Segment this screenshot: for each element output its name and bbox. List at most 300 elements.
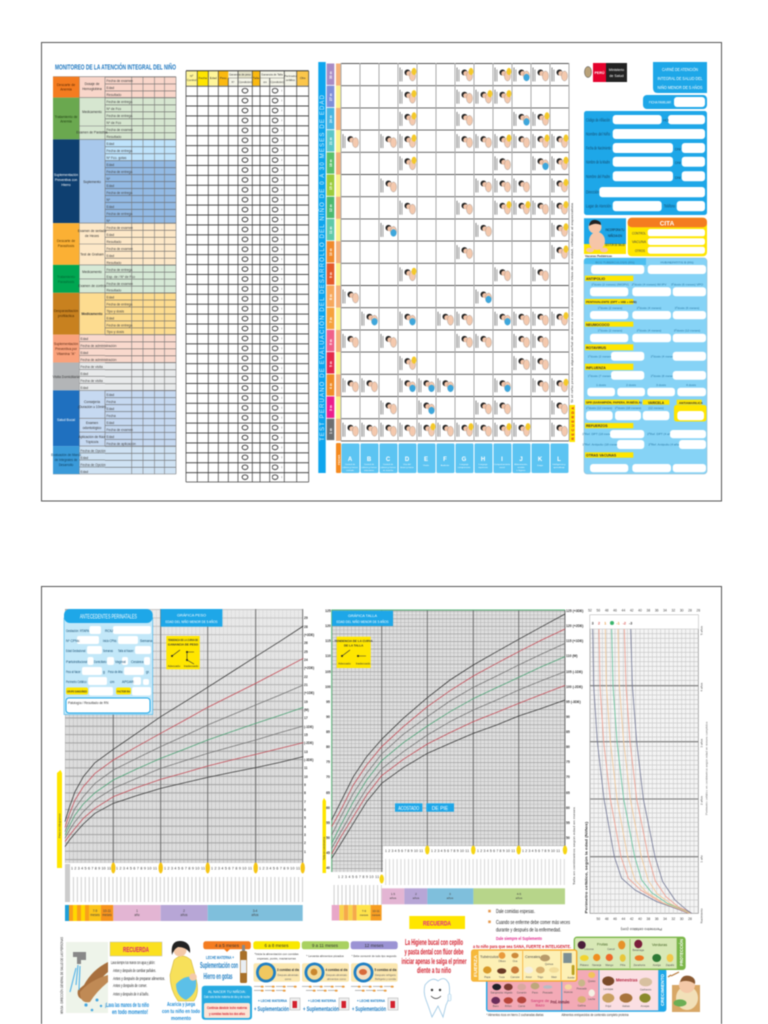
legume labels xyxy=(603,978,652,1008)
category: desparasitacion xyxy=(53,293,79,335)
right scale: 120 (+2DE) xyxy=(566,624,583,628)
column: 4 a 5 meses: Suplementación con xyxy=(200,961,238,970)
vaccine panel caption: Vacunas Pediátricas xyxy=(585,254,612,258)
blue box: AL NACER TU NIÑO/A: xyxy=(208,989,246,994)
right scale: (+3DE) xyxy=(304,633,314,637)
dose labels: 1ºdosis (12 meses) xyxy=(586,406,612,410)
row labels: Resultado xyxy=(106,135,122,139)
row labels: Edad xyxy=(106,393,114,397)
category: vitamina a xyxy=(53,335,79,362)
sub categories: Medicamento xyxy=(81,312,103,316)
food labels: Zapallo xyxy=(666,963,675,967)
animal food labels: Huevos xyxy=(564,990,573,994)
callout: wash hands xyxy=(105,1003,149,1016)
form labels: DNI xyxy=(675,176,681,180)
bullets xyxy=(488,910,491,923)
age strips right xyxy=(382,888,565,904)
row labels: Edad xyxy=(80,456,88,460)
month labels: 9 m xyxy=(329,272,333,278)
right scale: 90 xyxy=(566,715,570,719)
panel: proteccion foods xyxy=(574,937,685,969)
y axis arrow: Peso en kilogramos xyxy=(58,813,62,838)
sub categories: Tópico/a xyxy=(86,440,98,444)
animal food labels: Pescado xyxy=(543,990,553,994)
food labels: Carcol xyxy=(607,947,615,951)
group titles: Cereales xyxy=(525,955,540,959)
column: 6 a 8 meses: 6 a 8 meses xyxy=(265,943,289,948)
panel: proteccion foods: PROTECCIÓN xyxy=(679,939,684,966)
category labels: en marcha xyxy=(383,469,394,472)
form labels: Lugar de Atención xyxy=(586,204,611,208)
sub categories: Medicamento xyxy=(82,270,102,274)
age strips: años xyxy=(252,913,259,917)
right scale: (+2DE) xyxy=(304,666,314,670)
bottom scale: 40 xyxy=(638,917,642,921)
age strips right: años xyxy=(447,896,454,900)
category: desparasitacion: Desparasitación xyxy=(54,309,78,313)
labels: Gestación: xyxy=(66,629,79,633)
category labels: cabeza y tronco xyxy=(361,466,377,469)
legend: 3 xyxy=(592,621,594,625)
dose labels: 1ºdosis (2 meses) xyxy=(598,328,622,332)
panel: fuerza foods: FUERZA xyxy=(473,954,478,977)
category labels: E xyxy=(424,457,428,463)
sub categories: Examen xyxy=(86,421,98,425)
energy food labels: Yuca xyxy=(499,975,505,979)
tamizaje box: Patología / Resultado de RN xyxy=(68,701,109,705)
age strips right: 1.5 xyxy=(391,892,395,896)
spoons xyxy=(302,986,345,992)
right scale: 85 xyxy=(566,730,570,734)
left scale: 95 xyxy=(326,700,330,704)
group titles: Tubérculos xyxy=(480,955,499,959)
vaccine tag text: ANTIPOLIO xyxy=(586,277,605,281)
spoons xyxy=(351,986,394,992)
animal food labels: Corazón xyxy=(517,990,527,994)
row labels: Fecha xyxy=(106,400,116,404)
right scale: 4 xyxy=(304,825,306,829)
title: monitoreo: MONITOREO DE LA ATENCIÓN INTEGRAL DEL NIÑO xyxy=(55,62,176,72)
bottom axis caption: Perímetro cefálico (cm) xyxy=(620,927,662,932)
group titles xyxy=(597,942,667,947)
category: suplementacion: Preventiva con xyxy=(55,178,77,182)
advice text: Cuando se enferme debe comer más veces xyxy=(496,920,570,926)
height trend box: TENDENCIA DE LA CURVA xyxy=(335,639,374,643)
month labels: 8 m xyxy=(329,294,333,300)
supplement message xyxy=(473,936,571,949)
category labels: cabeza y tronco xyxy=(380,466,396,469)
milk plus supplement: + LECHE MATERNA xyxy=(308,999,336,1003)
blue box: y comidas hasta los dos años xyxy=(209,1012,245,1016)
table header: Peso xyxy=(220,76,227,80)
meal card: Refrigerio y comida xyxy=(375,977,396,981)
row labels: Fecha de examen xyxy=(106,226,133,230)
category: parasitosis: Parasitosis xyxy=(58,244,75,248)
age strips left: 7-9 xyxy=(362,909,366,913)
milk plus supplement xyxy=(352,999,386,1013)
dose labels: 1ºRef. Antipolio (18 meses) xyxy=(582,442,620,446)
weight chart title xyxy=(161,609,222,627)
yellow highlighted field xyxy=(674,405,706,422)
date tab xyxy=(336,443,341,473)
bottom scale: 50 xyxy=(596,917,600,921)
left scale: 105 xyxy=(325,670,331,674)
labels: Domiciliario xyxy=(94,660,107,664)
right scale: 17 xyxy=(304,716,308,720)
form labels: Fecha de Nacimiento xyxy=(586,146,611,150)
height chart title: GRÁFICA TALLA xyxy=(348,614,377,618)
heading: recuerda left xyxy=(110,942,162,956)
dose labels: 2ºdosis (4 meses) xyxy=(637,306,661,310)
message: Hierro en gotas xyxy=(204,972,233,981)
callout: caress and play: con tu niño en todo xyxy=(162,1009,201,1015)
category labels: brazo y mano xyxy=(400,466,414,469)
labels: Nº CPNs: xyxy=(66,639,80,643)
category labels: comprensivo xyxy=(458,466,471,469)
row labels: Fecha de examen xyxy=(106,428,133,432)
energy foods xyxy=(483,952,574,975)
subsection dividers xyxy=(53,77,176,474)
group titles: Frutas xyxy=(597,942,608,946)
row labels: Edad xyxy=(106,163,114,167)
labels: Semanas xyxy=(103,649,113,653)
right scale: 22 xyxy=(304,675,308,679)
animal foods captions: Prod. Animales xyxy=(550,1000,570,1004)
left scale: 115 xyxy=(325,639,331,643)
category: suplementacion: Suplementación xyxy=(54,173,78,177)
x axis months: 1 2 3 4 5 6 7 8 9 10 11 xyxy=(259,866,300,870)
blood group tags: GRUPO SANGUÍNEO xyxy=(67,688,87,694)
year lines xyxy=(113,609,303,863)
right scale: 50 xyxy=(566,836,570,840)
footnote: * Alimentos ricos en hierro 2 cucharadas diarias xyxy=(486,1013,544,1017)
row labels: Edad xyxy=(80,351,88,355)
meal card: alimentos como xyxy=(327,977,347,981)
chart title: Perímetro cefálico, según la edad (Niños) xyxy=(584,821,588,913)
animal food labels: Gallina xyxy=(578,1004,586,1008)
cita panel: CITA xyxy=(660,220,675,228)
blood group tags: FACTOR RH xyxy=(117,690,131,694)
age strips left xyxy=(332,905,382,920)
chart: head circumference xyxy=(584,609,708,923)
row labels: Edad xyxy=(80,337,88,341)
test grid xyxy=(341,64,569,441)
food labels: Plátano xyxy=(580,963,589,967)
dose labels: 1ºdosis (7 meses) xyxy=(588,374,612,378)
left scale: 125 xyxy=(325,609,331,613)
legend: 2 xyxy=(598,621,600,625)
legume labels: Lentejas xyxy=(603,987,614,991)
cita panel: OTROS xyxy=(635,249,645,253)
vaccine tag text: OTRAS VACUNAS xyxy=(586,454,617,458)
category: vitamina a: Vitamina "A" xyxy=(57,352,76,356)
dose labels: 2ºRef. DPT (4 años) xyxy=(647,432,675,436)
right scale: 7 xyxy=(304,800,306,804)
month labels: 12 m xyxy=(329,204,333,212)
chart grid xyxy=(590,615,698,913)
top scale: 34 xyxy=(663,609,667,613)
right scale: 21 xyxy=(304,683,308,687)
logo: ministerio de salud: PERÚ xyxy=(594,70,605,75)
age labels: 5 años xyxy=(699,626,703,635)
month labels: 21 m xyxy=(329,137,333,145)
category: vitamina a: Suplementación xyxy=(54,342,78,346)
dose labels: 1 dosis xyxy=(596,383,606,387)
vaccine tags xyxy=(585,276,702,458)
weight chart title: EDAD DEL NIÑO MENOR DE 5 AÑOS xyxy=(166,619,218,624)
category labels: rotaciones xyxy=(364,469,375,472)
month labels xyxy=(327,64,334,440)
animal foods captions: Bazo xyxy=(535,1002,545,1008)
legend: -3 xyxy=(629,621,632,625)
dose labels: 1ºdosis (2 meses) (IMOPV) xyxy=(591,282,629,286)
illustration: child eating xyxy=(668,972,700,1012)
right scale: 25 xyxy=(304,650,308,654)
top scale: 28 xyxy=(688,609,692,613)
meal card: Después aliméntalo xyxy=(278,973,299,977)
illustration: hand washing xyxy=(66,942,108,1013)
age strips: meses xyxy=(102,913,112,917)
right scale: (-3DE) xyxy=(304,758,313,762)
month labels: 10 m xyxy=(329,248,333,256)
row labels: Fecha de entrega xyxy=(106,114,133,118)
height trend box: Adecuado xyxy=(338,662,351,666)
category: desparasitacion: profiláctica xyxy=(58,314,74,318)
category labels: cabeza y tronco xyxy=(342,466,358,469)
panel: monitoring table xyxy=(51,77,176,474)
message: LECHE MATERNA + xyxy=(206,955,234,960)
row labels: Fecha de visita xyxy=(80,379,103,383)
vaccine tag text: NEUMOCOCO xyxy=(586,323,610,327)
age strips: 3-4 xyxy=(253,909,258,913)
category labels: Inteligencia y xyxy=(553,463,566,466)
feeding advice xyxy=(488,909,570,934)
baby promo box: INCORPORA TU xyxy=(606,228,625,232)
panel: perinatal history xyxy=(64,609,153,714)
left scale: 40 xyxy=(326,866,330,870)
table section backgrounds xyxy=(79,77,176,474)
food labels xyxy=(580,947,675,967)
row labels: Fecha de administración xyxy=(80,358,117,362)
top scale: 48 xyxy=(605,609,609,613)
right scale: 115 (+1DE) xyxy=(566,639,583,643)
category labels: Control de xyxy=(364,463,375,466)
category: visita domiciliaria xyxy=(53,362,79,390)
age strips left: meses xyxy=(360,913,369,917)
lower card frame xyxy=(42,586,722,1024)
right scale: 100 (-2DE) xyxy=(566,685,583,689)
category labels: D xyxy=(405,457,410,463)
labels: Peso al Nacer: xyxy=(66,670,81,674)
icon: seated baby xyxy=(586,220,608,252)
right scale: 29 xyxy=(304,616,308,620)
column: 12 meses xyxy=(351,941,398,1013)
hand washing list: Antes y después de comer. xyxy=(113,983,147,988)
animal foods captions xyxy=(531,998,570,1008)
category: evaluacion: Desarrollo xyxy=(59,463,73,467)
vaccine tag text: REFUERZOS xyxy=(586,424,608,428)
age strips right: 4-5 xyxy=(517,892,522,896)
food labels: Naranja xyxy=(592,963,602,967)
dose labels xyxy=(582,282,704,446)
baby milestone figures xyxy=(342,68,568,437)
right scale: 110 (M) xyxy=(566,654,578,658)
labels: Semana xyxy=(140,639,152,643)
month labels: 30 m xyxy=(329,71,333,79)
category labels: sentado xyxy=(346,469,355,472)
y axis arrow: Talla en centímetros xyxy=(322,836,326,860)
category labels: Visión xyxy=(423,465,430,467)
labels: Edad Gestacional: xyxy=(66,649,86,653)
row labels: Fecha de entrega xyxy=(106,191,133,195)
sub categories: (Duración ≥ 10min) xyxy=(78,405,106,409)
category: descarte de anemia xyxy=(53,77,79,98)
left scale: 90 xyxy=(326,715,330,719)
row labels: Resultado xyxy=(106,288,122,292)
right scale: 3 xyxy=(304,833,306,837)
left scale: 85 xyxy=(326,730,330,734)
category labels: A xyxy=(348,457,353,463)
meal card: Después refrigerio xyxy=(375,973,396,977)
form labels: Dirección xyxy=(586,190,599,194)
top scale: 50 xyxy=(596,609,600,613)
animal food labels: Bazo xyxy=(493,1004,499,1008)
animal food labels: Hígado xyxy=(504,990,513,994)
legume labels: Frijol xyxy=(605,1004,612,1008)
category labels: Alimentación, xyxy=(514,463,528,466)
x axis months right: 1 2 3 4 5 6 7 8 9 10 11 xyxy=(385,849,423,853)
category: tratamiento de anemia xyxy=(53,98,79,139)
panel: vaccination record xyxy=(582,258,707,474)
row labels: Fecha de entrega xyxy=(106,170,133,174)
left scale: 60 xyxy=(326,806,330,810)
right scale: 13 xyxy=(304,750,308,754)
milk plus supplement xyxy=(303,999,339,1013)
energy food labels: Quinua xyxy=(545,962,554,966)
row labels: Fecha de administración xyxy=(80,344,117,348)
row labels: Fecha de Opción xyxy=(80,449,106,453)
bcg / hvb header xyxy=(584,258,694,265)
right scale: 5 xyxy=(304,816,306,820)
heading: recuerda left: RECUERDA xyxy=(123,945,149,954)
warning stamp: RECUERDA xyxy=(571,407,575,440)
category labels: Juego xyxy=(537,465,544,467)
right scale: 9 xyxy=(304,783,306,787)
meal card: Después aliméntalo xyxy=(326,973,347,977)
category: parasitosis xyxy=(53,223,79,265)
row labels: Fecha de entrega xyxy=(106,302,133,306)
weight curves xyxy=(65,626,303,847)
column: 6 a 8 meses: espesas, purés, mazamorras xyxy=(257,956,296,960)
category: descarte de anemia: Anemia xyxy=(60,88,72,92)
row labels: Fecha de visita xyxy=(80,365,103,369)
vertical title bar: TEST PERUANO DE EVALUACIÓN DEL DESARROLLO DEL NIÑO DE 0 A 30 MESES DE EDAD xyxy=(319,94,326,441)
right scale: (M) xyxy=(304,708,309,712)
row labels: Fecha de entrega xyxy=(106,100,133,104)
right scale: 125 (+3DE) xyxy=(566,609,583,613)
sub categories: Test de Graham xyxy=(80,252,104,256)
energy food labels xyxy=(484,959,575,980)
position tags: ACOSTADO xyxy=(398,806,419,812)
bottom scale: 32 xyxy=(671,917,675,921)
table header: cm xyxy=(263,81,268,84)
column lines xyxy=(186,71,309,482)
right scale: 15 xyxy=(304,733,308,737)
age strips right: 2 xyxy=(415,892,417,896)
animal food labels: Pescado xyxy=(577,986,587,990)
energy food labels: Camote xyxy=(510,975,520,979)
category: salud bucal xyxy=(53,390,79,446)
energy food labels: Arroz xyxy=(526,975,532,979)
labels: RCIU xyxy=(105,629,114,633)
dental hygiene message: y pasta dental con flúor debe xyxy=(404,948,464,956)
energy food labels: Olluco xyxy=(498,959,506,963)
dose labels: 2ºdosis (4 meses) IM IPV xyxy=(632,282,667,286)
category: tratamiento parasitosis xyxy=(53,265,79,293)
dental hygiene message: iniciar apenas le salga el primer xyxy=(402,957,466,966)
date column stripes xyxy=(336,64,341,441)
row labels: Tipo y dosis xyxy=(106,310,124,314)
age strips: meses xyxy=(90,913,100,917)
month labels: 5 m xyxy=(329,361,333,367)
category labels: Lenguaje xyxy=(478,464,488,466)
y axis arrow xyxy=(322,798,326,873)
column: 12 meses: 12 meses xyxy=(364,943,384,948)
right scale: 19 xyxy=(304,700,308,704)
header: 4 a 5 meses xyxy=(215,943,240,948)
month labels: 11 m xyxy=(329,226,333,234)
top scale: 36 xyxy=(655,609,659,613)
legend: -2 xyxy=(623,621,626,625)
food labels: Mango xyxy=(605,963,614,967)
height trend box xyxy=(335,637,374,668)
x axis months left: 1 2 3 4 5 6 7 8 9 10 11 xyxy=(338,875,379,879)
age strips: 10-11 xyxy=(103,909,111,913)
category labels: Lenguaje xyxy=(459,464,469,466)
heading: recuerda dental xyxy=(409,916,465,929)
food labels: Zanahoria xyxy=(633,963,646,967)
table header xyxy=(186,71,309,86)
blue box xyxy=(202,986,252,1020)
side note: Si el niño presenta alguna señal de alarma o no cumple con los hitos de su edad, refiéralo al especialista xyxy=(570,202,574,403)
footnote xyxy=(486,1013,628,1017)
panel header: ANTECEDENTES PERINATALES xyxy=(80,614,137,620)
height trend box: Inadecuado xyxy=(356,662,371,666)
heading: recuerda dental: RECUERDA xyxy=(423,920,451,928)
category labels: e higiene xyxy=(517,470,526,472)
height chart title xyxy=(332,611,393,626)
supplement message: a tu niño para que sea SANA, FUERTE e INTELIGENTE. xyxy=(473,944,571,949)
table header: Obs xyxy=(300,76,306,80)
icon: supplement box xyxy=(339,998,349,1010)
dose labels: 3ºdosis (6 meses) VPO xyxy=(671,282,704,286)
warning stamp xyxy=(570,405,575,442)
row labels: Fecha de examen xyxy=(106,79,133,83)
left scale: 50 xyxy=(326,836,330,840)
vaccine tag text: SPR (SARAMPIÓN, PAPERA, RUBÉOLA) xyxy=(586,400,642,405)
row labels: Fecha de entrega xyxy=(106,149,133,153)
x axis months: 1 2 3 4 5 6 7 8 9 10 11 xyxy=(71,866,111,870)
food labels: Lúcuma xyxy=(584,947,594,951)
dental hygiene message: diente a tu niño xyxy=(417,966,451,975)
milk plus supplement: + Suplementación xyxy=(303,1006,339,1013)
category labels: F xyxy=(443,457,447,463)
hand washing list xyxy=(111,960,165,996)
right scale: 11 xyxy=(304,766,308,770)
vaccine tag text xyxy=(586,277,704,458)
milk plus supplement: + Suplementación xyxy=(352,1006,386,1013)
sub categories: Dosaje de xyxy=(85,82,100,86)
